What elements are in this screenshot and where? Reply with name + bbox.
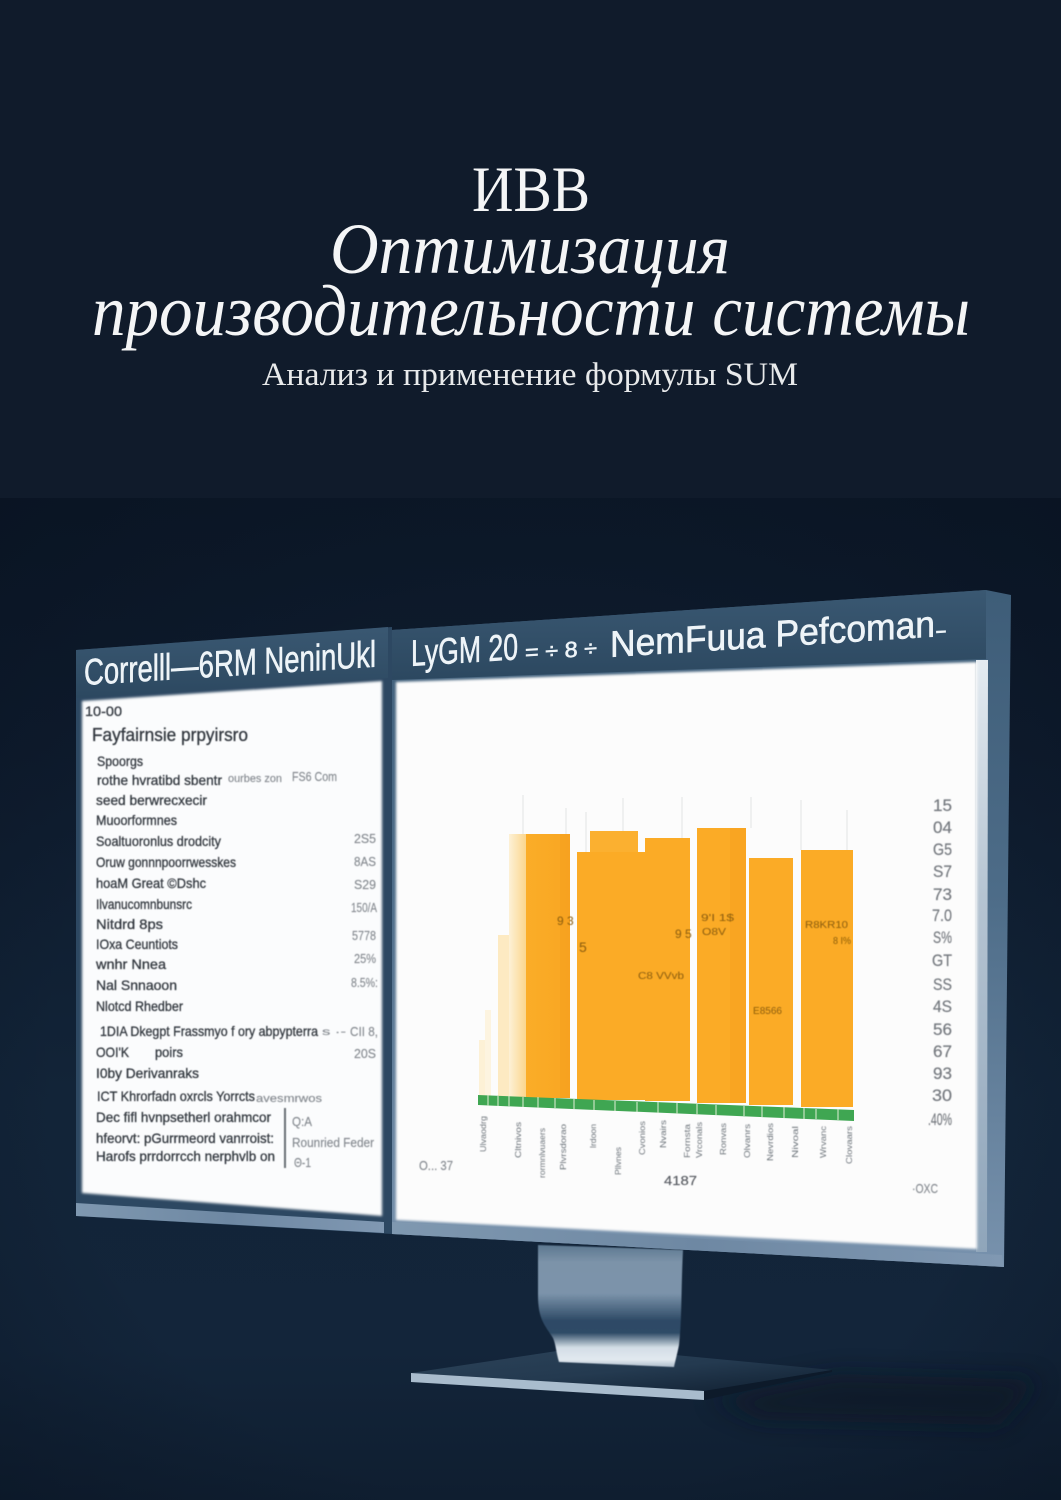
background: lower image area (0, 498, 1061, 1500)
pale fade-in bars (479, 834, 526, 1097)
bar labels: R8KR10 (805, 920, 848, 931)
left panel rows: Fayfairnsie prpyirsro (92, 725, 248, 745)
left panel rows: ourbes zon (228, 773, 282, 785)
y-axis numbers: 73 (933, 885, 952, 904)
left panel rows: ICT Khrorfadn oxrcls Yorrcts (97, 1088, 255, 1104)
right panel (392, 590, 1011, 1267)
title line 2: производительности системы (92, 271, 970, 351)
green axis strip (478, 1095, 854, 1121)
left panel bottom lip (76, 1203, 384, 1233)
rotated axis labels: Nivoal (791, 1126, 800, 1158)
neck (538, 1245, 683, 1367)
base right edge (704, 1370, 832, 1400)
left panel rows: Nlotcd Rhedber (96, 998, 183, 1014)
left panel rows: FS6 Com (292, 769, 337, 784)
left panel rows: Spoorgs (97, 753, 143, 769)
left panel rows: CII 8, (350, 1024, 378, 1039)
left panel rows: Nitdrd 8ps (96, 916, 163, 932)
rotated axis labels: Ronvas (719, 1123, 728, 1155)
left panel (76, 627, 392, 1234)
rotated axis labels: lrdoon (589, 1124, 598, 1148)
left panel rows: OOI'K (96, 1044, 130, 1060)
left panel rows: s ·‑ (322, 1027, 346, 1038)
rotated axis labels: Plvrsdorao (559, 1123, 568, 1170)
y-axis numbers: SS (933, 975, 952, 994)
left panel rows: wnhr Nnea (95, 956, 166, 972)
right header text: NemFuua Pefcoman (610, 603, 935, 665)
left panel rows: Harofs prrdorrcch nerphvlb on (96, 1148, 275, 1164)
axis captions: 4187 (664, 1173, 697, 1188)
rotated axis labels: Ulvaodrg (479, 1116, 488, 1152)
gridlines (523, 795, 847, 852)
bar labels: 9 3 (557, 914, 574, 928)
left panel frame (76, 627, 392, 1234)
axis captions: ·OXC (912, 1181, 938, 1196)
author: ИВВ (472, 154, 590, 226)
rotated axis labels (479, 1116, 854, 1178)
rotated axis labels: Pllvnes (614, 1147, 623, 1175)
left panel rows: hfeorvt: pGurrmeord vanrroist: (96, 1130, 274, 1146)
right header text: LyGM 20 (411, 625, 518, 674)
left panel rows: Oruw gonnnpoorrwesskes (96, 854, 236, 870)
left panel rows: Muoorformnes (96, 812, 177, 828)
bar labels: E8566 (753, 1006, 782, 1017)
rotated axis labels: Clovaars (845, 1126, 854, 1164)
rotated axis labels: Olvanrs (743, 1124, 752, 1158)
right panel bottom lip (392, 1222, 1004, 1267)
left panel rows: hoaM Great ©Dshc (96, 875, 206, 891)
y-axis numbers: 4S (933, 997, 952, 1016)
base top surface (411, 1351, 832, 1391)
left panel rows: Rounried Feder (292, 1135, 375, 1150)
left panel rows: 1DIA Dkegpt Frassmyo f ory abpypterra (100, 1023, 318, 1039)
left panel rows: IOxa Ceuntiots (96, 936, 178, 952)
background: upper title area (0, 0, 1061, 498)
rotated axis labels: Vrconals (695, 1122, 704, 1158)
monitor stand and base (411, 1245, 1040, 1425)
base front edge (411, 1373, 704, 1400)
left panel rows: 2S5 (354, 831, 376, 846)
bar chart (419, 795, 938, 1196)
left panel rows: Nal Snnaoon (96, 977, 177, 993)
rotated axis labels: Fornsta (683, 1123, 692, 1158)
axis captions (419, 1158, 938, 1196)
left panel screen (82, 681, 382, 1216)
left panel rows: Soaltuoronlus drodcity (96, 833, 221, 849)
left panel rows: 8.5%: (351, 975, 378, 990)
left panel rows (85, 703, 378, 1170)
right header bar (392, 590, 986, 680)
y-axis numbers: 67 (933, 1042, 952, 1061)
bar labels: 8 I% (833, 936, 851, 947)
right panel frame (392, 590, 1011, 1267)
y-axis numbers: 56 (933, 1020, 952, 1039)
left panel rows: 150/A (351, 900, 377, 915)
rotated axis labels: Cvonios (638, 1121, 647, 1155)
y-axis numbers: 04 (933, 818, 952, 837)
subtitle: Анализ и применение формулы SUM (262, 357, 798, 393)
left panel rows: 8AS (354, 854, 376, 869)
axis captions: O... 37 (419, 1158, 453, 1173)
left panel rows: 20S (354, 1046, 376, 1061)
left panel rows: Dec fifl hvnpsetherl orahmcor (96, 1109, 271, 1125)
y-axis numbers: 7.0 (932, 906, 952, 925)
rotated axis labels: Nvairs (659, 1120, 668, 1148)
left panel rows: 25% (354, 951, 376, 966)
y-axis numbers: 30 (932, 1086, 952, 1105)
rotated axis labels: Wrvanc (819, 1126, 828, 1158)
left panel rows: I0by Derivanraks (96, 1065, 199, 1081)
left panel rows: rothe hvratibd sbentr (97, 772, 222, 788)
left panel rows: 5778 (352, 928, 376, 943)
y-axis numbers: GT (932, 951, 952, 970)
right header text: = ÷ 8 ÷ (525, 635, 597, 665)
left panel rows: Q:A (292, 1114, 312, 1129)
rotated axis labels: rormnlvuaers (538, 1128, 547, 1178)
rotated axis labels: Cltnivos (514, 1122, 523, 1158)
left panel rows: 10-00 (85, 703, 122, 719)
y-axis numbers: G5 (933, 840, 952, 859)
title block (92, 154, 970, 393)
bar labels: 5 (579, 939, 587, 955)
y-axis numbers: 15 (933, 796, 952, 815)
bar labels: 9 5 (675, 927, 692, 941)
y-axis numbers (928, 796, 952, 1129)
y-axis numbers: .40% (928, 1110, 952, 1129)
left panel rows: seed berwrecxecir (96, 792, 207, 808)
y-axis numbers: S7 (933, 862, 952, 881)
bar labels: O8V (702, 927, 726, 938)
base shadow (710, 1374, 1040, 1425)
bar labels: 9'I 1$ (701, 913, 735, 924)
orange bars (526, 828, 853, 1107)
left panel rows: avesmrwos (256, 1093, 323, 1105)
right header text: - (935, 617, 947, 643)
bar labels (557, 913, 851, 1017)
bar labels: C8 VVvb (638, 971, 685, 982)
right panel inner highlight (976, 660, 988, 1252)
title line 1: Оптимизация (330, 209, 730, 289)
right panel screen (396, 662, 977, 1249)
right header text (411, 603, 947, 674)
y-axis numbers: 93 (933, 1064, 952, 1083)
left header bar (76, 627, 388, 698)
left panel rows: S29 (354, 877, 376, 892)
left panel rows: Θ-1 (294, 1155, 311, 1170)
y-axis numbers: S% (933, 928, 952, 947)
left panel rows: Ilvanucomnbunsrc (96, 896, 192, 912)
left header text: Correlll—6RM NeninUkl (84, 633, 376, 693)
rotated axis labels: Nevrdios (766, 1123, 775, 1161)
left panel rows: poirs (155, 1044, 183, 1060)
